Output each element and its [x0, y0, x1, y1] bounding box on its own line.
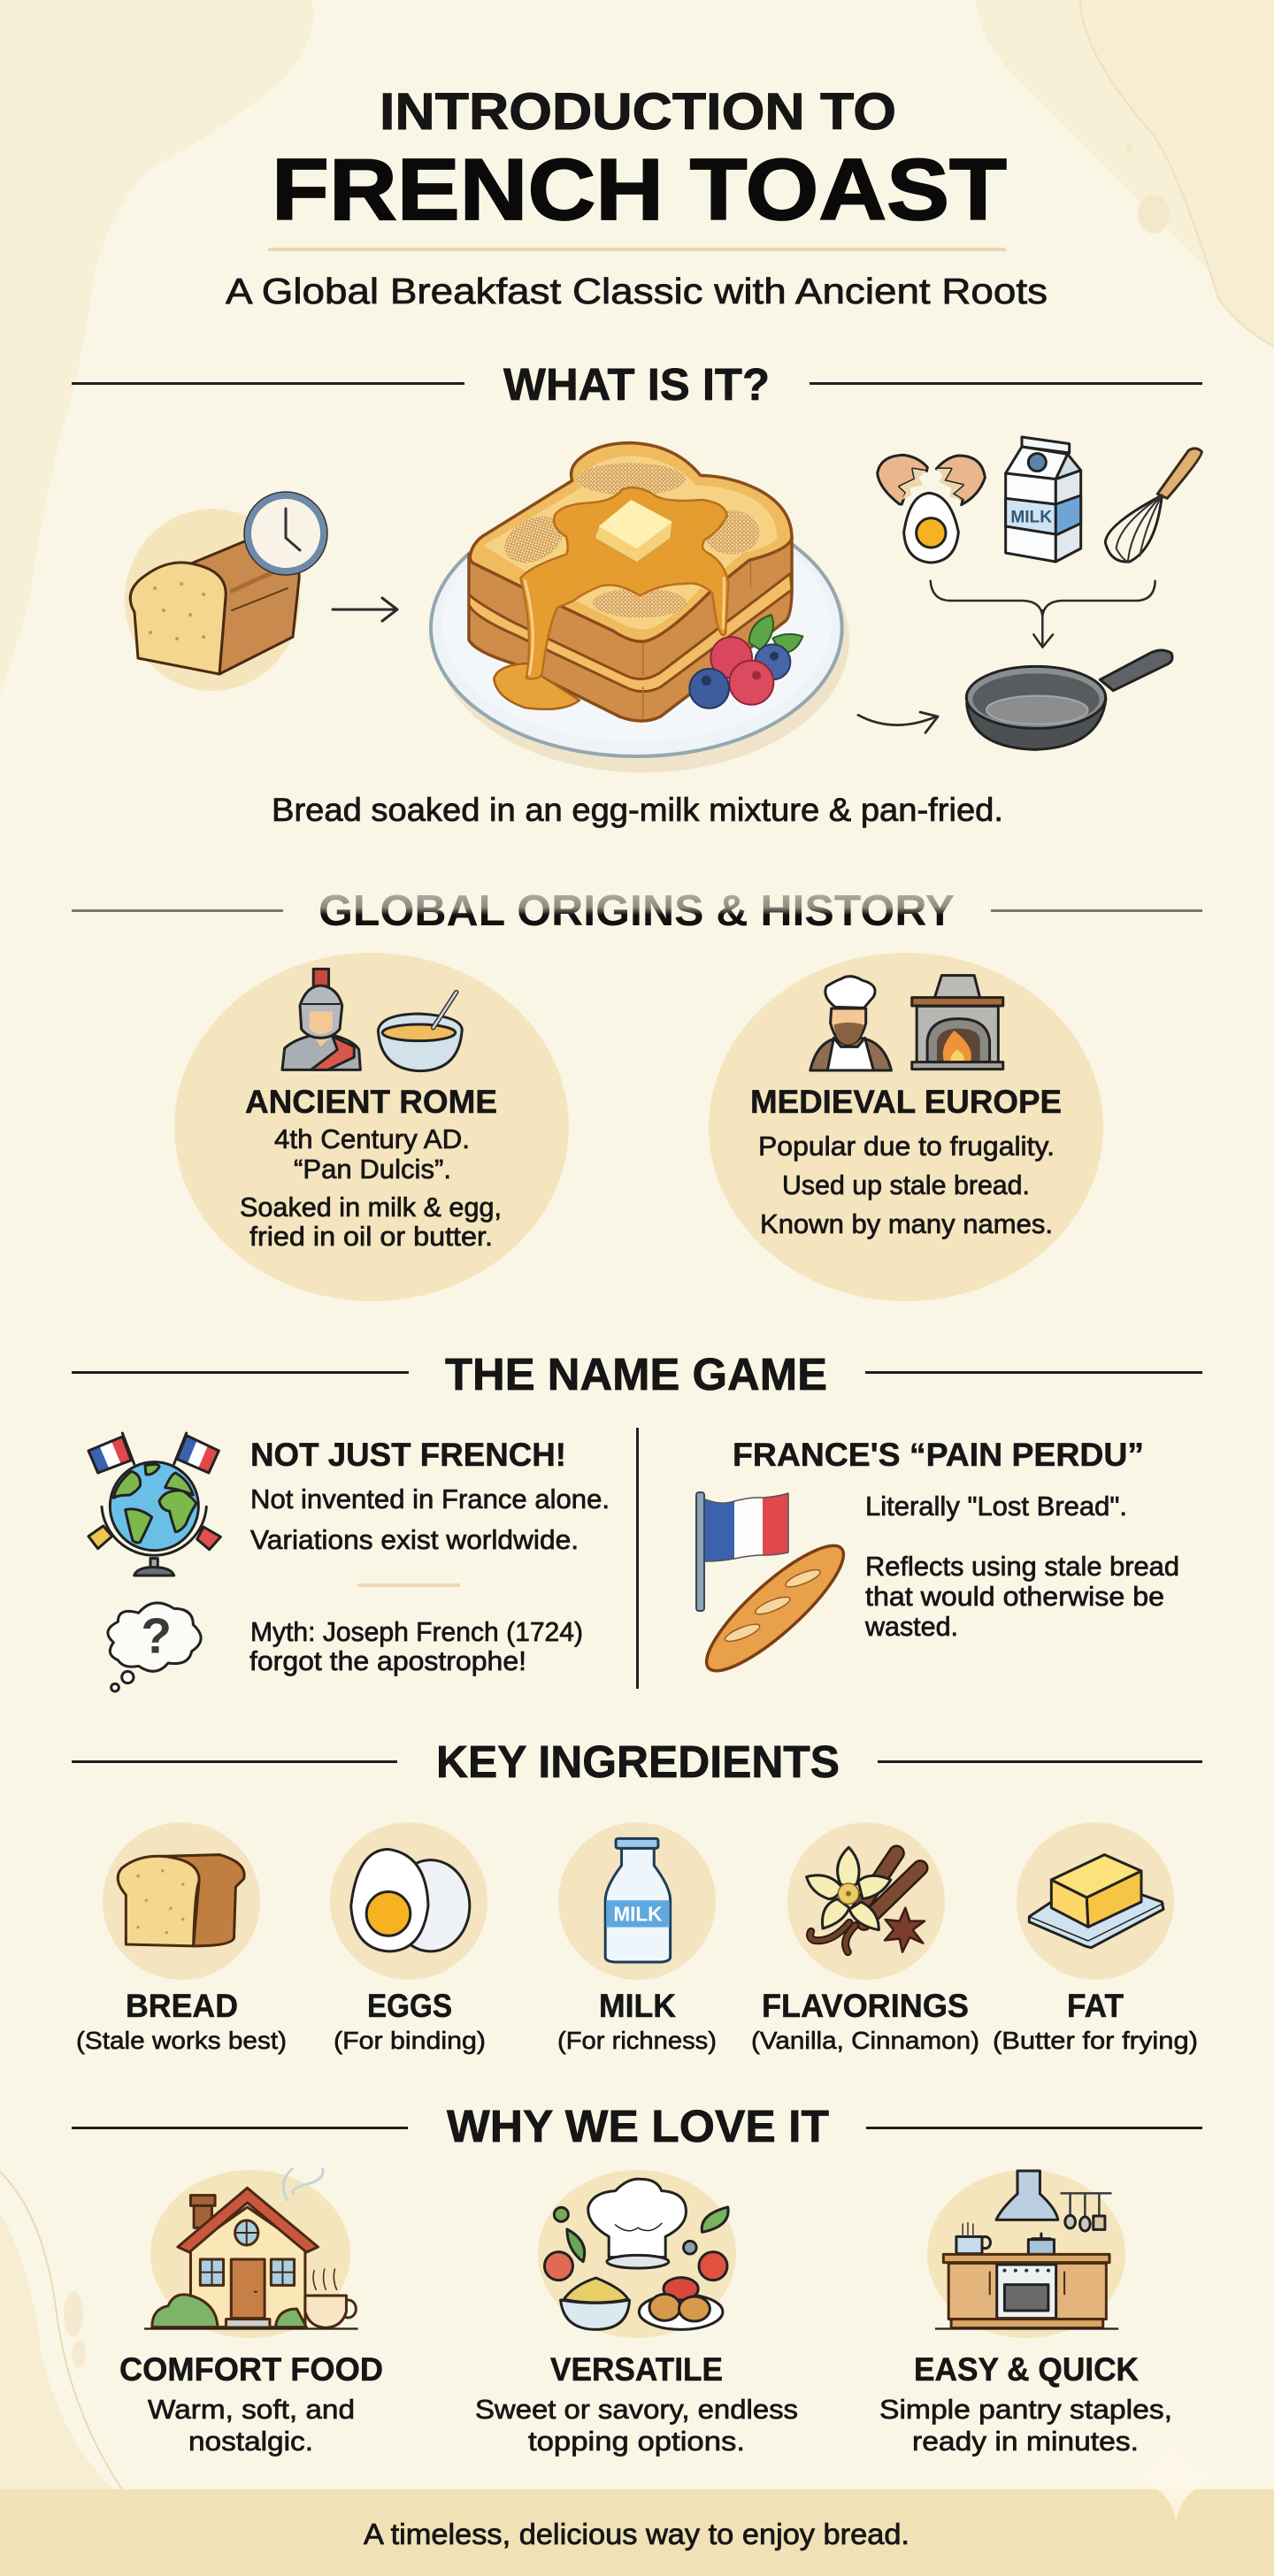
ingredient: eggs — [330, 1822, 487, 2054]
title block — [226, 83, 1048, 311]
heading: the name game: THE NAME GAME — [445, 1349, 827, 1399]
text: versatile details — [475, 2394, 798, 2457]
icon: thought cloud with question mark: ? — [141, 1608, 172, 1664]
reason: easy and quick — [879, 2170, 1172, 2457]
text: easy and quick details: Simple pantry staples, — [879, 2394, 1172, 2425]
heading: what is it: WHAT IS IT? — [503, 359, 770, 410]
label: bread: BREAD — [126, 1988, 238, 2024]
panel: medieval europe — [709, 953, 1103, 1301]
section: the name game — [72, 1349, 1202, 1691]
icon: baguette — [692, 1530, 858, 1686]
label: flavorings: FLAVORINGS — [762, 1988, 969, 2024]
reason: comfort food — [119, 2169, 383, 2457]
text: medieval europe details: Known by many names. — [760, 1208, 1053, 1239]
icon: chef hat and dishes — [544, 2179, 728, 2329]
text: ancient rome details — [240, 1123, 502, 1252]
note: flavorings: (Vanilla, Cinnamon) — [751, 2027, 979, 2054]
text: myth: Myth: Joseph French (1724) — [250, 1616, 583, 1647]
note: milk: (For richness) — [557, 2027, 717, 2054]
arrow: bracket into pan — [931, 581, 1155, 648]
note: eggs: (For binding) — [334, 2027, 486, 2054]
text: medieval europe details: Used up stale bread. — [782, 1169, 1030, 1200]
text: medieval europe details — [758, 1131, 1055, 1239]
text: ancient rome details: 4th Century AD. — [274, 1123, 470, 1154]
text: easy and quick details — [879, 2394, 1172, 2457]
ingredient: flavorings — [751, 1822, 979, 2054]
icon: french toast on plate — [431, 443, 849, 772]
text: comfort food details — [148, 2394, 355, 2457]
icon: milk carton: MILK — [1010, 509, 1052, 527]
heading: key ingredients: KEY INGREDIENTS — [436, 1736, 840, 1787]
text: ancient rome details: Soaked in milk & egg, — [240, 1192, 502, 1223]
text: ancient rome details: “Pan Dulcis”. — [294, 1154, 451, 1184]
icon: whisk — [1105, 448, 1201, 562]
text: versatile details: topping options. — [528, 2426, 745, 2457]
text: not just french details — [250, 1484, 610, 1555]
text: comfort food details: nostalgic. — [188, 2426, 313, 2457]
ingredient: milk — [557, 1822, 717, 2054]
text: medieval europe details: Popular due to frugality. — [758, 1131, 1055, 1162]
panel: not just french — [88, 1433, 610, 1691]
text: easy and quick details: ready in minutes. — [912, 2426, 1139, 2457]
caption: what is it: Bread soaked in an egg-milk mixture & pan-fried. — [272, 792, 1003, 828]
reason: versatile — [475, 2170, 798, 2457]
heading: why we love it: WHY WE LOVE IT — [447, 2101, 829, 2151]
arrow: bread to toast — [333, 598, 397, 621]
icon: ingredients, whisk, bracket and pan — [858, 437, 1201, 749]
ingredient: fat — [993, 1822, 1198, 2054]
heading: ancient rome: ANCIENT ROME — [245, 1084, 497, 1120]
heading: not just french: NOT JUST FRENCH! — [250, 1437, 566, 1473]
icon: frying pan — [966, 650, 1172, 749]
text: pain perdu details: Literally "Lost Bread". — [865, 1491, 1127, 1522]
icon: milk carton — [1006, 437, 1081, 562]
icon: cracked egg shells — [878, 455, 985, 563]
ingredient: bread — [76, 1822, 287, 2054]
icon: kitchen — [935, 2171, 1118, 2330]
footer text: A timeless, delicious way to enjoy bread. — [364, 2518, 909, 2550]
note: fat: (Butter for frying) — [993, 2027, 1198, 2054]
section: why we love it — [72, 2101, 1202, 2457]
heading: global origins: GLOBAL ORIGINS & HISTORY — [318, 887, 955, 935]
icon: bread loaf with clock — [125, 492, 327, 691]
note: bread: (Stale works best) — [76, 2027, 287, 2054]
subtitle: A Global Breakfast Classic with Ancient Roots — [226, 271, 1048, 311]
label: easy and quick: EASY & QUICK — [914, 2351, 1139, 2388]
text: pain perdu details — [864, 1491, 1179, 1642]
icons: roman soldier and bowl — [282, 969, 462, 1071]
label: comfort food: COMFORT FOOD — [119, 2351, 383, 2388]
label: fat: FAT — [1067, 1988, 1124, 2024]
footer band — [0, 2428, 1274, 2576]
text: pain perdu details: wasted. — [864, 1611, 958, 1642]
heading: pain perdu: FRANCE'S “PAIN PERDU” — [733, 1437, 1144, 1473]
text: myth — [249, 1616, 583, 1676]
text: pain perdu details: that would otherwise be — [865, 1581, 1164, 1612]
text: comfort food details: Warm, soft, and — [148, 2394, 355, 2425]
label: milk: MILK — [599, 1988, 676, 2024]
label: versatile: VERSATILE — [550, 2351, 723, 2388]
text: versatile details: Sweet or savory, endless — [475, 2394, 798, 2425]
text: pain perdu details: Reflects using stale bread — [865, 1551, 1179, 1582]
heading: medieval europe: MEDIEVAL EUROPE — [750, 1084, 1062, 1120]
text: not just french details: Variations exist worldwide. — [250, 1524, 579, 1555]
text: myth: forgot the apostrophe! — [249, 1645, 526, 1676]
icon: cozy house — [144, 2169, 358, 2330]
icon: thought cloud with question mark — [108, 1603, 201, 1691]
arrow: curved to pan — [858, 712, 938, 732]
panel: ancient rome — [174, 953, 569, 1301]
panel: france's pain perdu — [692, 1437, 1179, 1686]
text: ancient rome details: fried in oil or butter. — [249, 1221, 493, 1252]
section: global origins and history — [72, 887, 1202, 1301]
section: key ingredients — [72, 1736, 1202, 2054]
section: what is it — [72, 359, 1202, 828]
icon: french flag — [696, 1492, 788, 1611]
icons: baker and fireplace — [810, 976, 1003, 1070]
label: eggs: EGGS — [367, 1988, 452, 2024]
title: french toast: FRENCH TOAST — [272, 141, 1007, 238]
icon: globe with flags — [88, 1433, 220, 1576]
text: not just french details: Not invented in France alone. — [250, 1484, 610, 1514]
ingredient: milk: MILK — [613, 1903, 663, 1926]
title: introduction to: INTRODUCTION TO — [380, 83, 896, 141]
